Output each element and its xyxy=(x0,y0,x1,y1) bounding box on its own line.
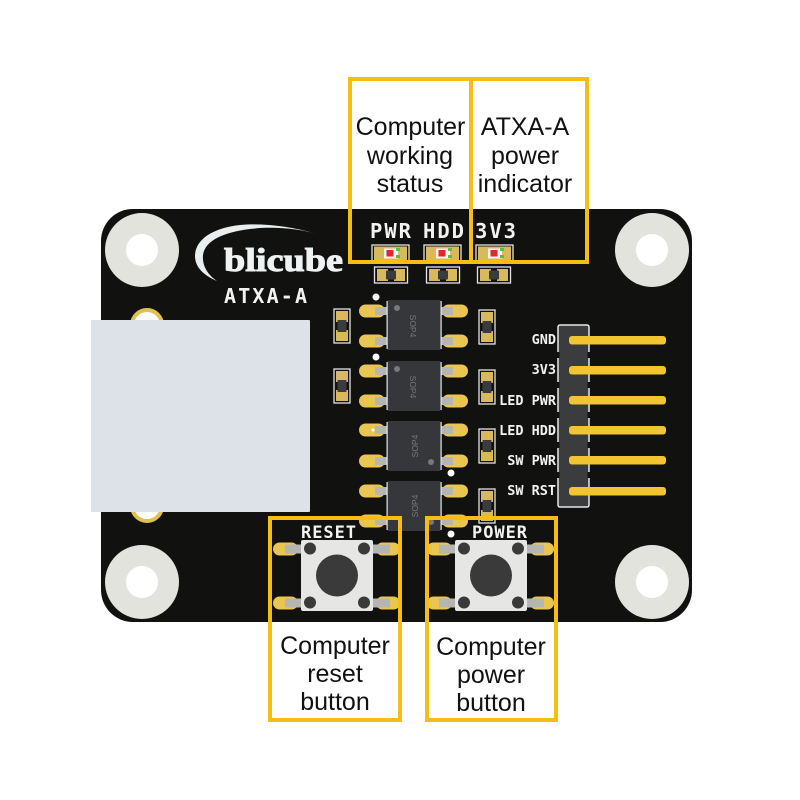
optocoupler legs xyxy=(375,307,453,525)
label: ATXA-A power indicator: indicator xyxy=(478,170,572,198)
callout box: computer working status xyxy=(350,79,471,262)
board name: ATXA-A xyxy=(224,284,307,308)
chip: SOP4 four: SOP4 xyxy=(410,494,420,517)
callout box: computer power button xyxy=(427,518,556,720)
LED row xyxy=(372,245,513,261)
chip: SOP4 three xyxy=(386,421,442,471)
chip: SOP4 two: SOP4 xyxy=(408,376,418,399)
label: computer reset button: button xyxy=(300,688,370,716)
label: computer power button xyxy=(436,633,546,717)
label: computer power button: button xyxy=(456,689,526,717)
pin labels: SW RST xyxy=(507,483,556,499)
mounting hole: top left xyxy=(105,213,179,287)
polarity dots xyxy=(372,294,454,538)
mounting hole: top right xyxy=(615,213,689,287)
pin header xyxy=(557,325,666,507)
silkscreen: 3V3: 3V3 xyxy=(475,219,516,243)
label: computer reset button: reset xyxy=(307,660,363,688)
chip: SOP4 two xyxy=(386,361,442,411)
mounting hole: bottom right xyxy=(615,545,689,619)
vertical resistors xyxy=(334,309,495,523)
label: computer power button: power xyxy=(457,661,525,689)
silkscreen: PWR: PWR xyxy=(370,219,412,243)
chip: SOP4 four xyxy=(386,481,442,531)
silkscreen: HDD: HDD xyxy=(423,219,464,243)
pin labels xyxy=(499,332,557,499)
label: computer working status: Computer xyxy=(356,113,465,141)
label: computer working status: status xyxy=(377,170,443,198)
connector through-hole pads xyxy=(132,310,162,521)
pin labels: 3V3 xyxy=(532,362,556,378)
pin labels: GND xyxy=(532,332,556,348)
label: computer power button: Computer xyxy=(436,633,546,661)
label: ATXA-A power indicator: ATXA-A xyxy=(481,113,570,141)
LED resistors xyxy=(374,267,510,283)
reset button xyxy=(273,540,400,611)
silkscreen: POWER: POWER xyxy=(472,523,528,543)
network connector housing xyxy=(91,320,310,512)
callout box: computer reset button xyxy=(270,518,400,720)
power button xyxy=(427,540,554,611)
label: computer working status: working xyxy=(366,142,453,170)
PCB board xyxy=(101,209,692,622)
mounting hole: bottom left xyxy=(105,545,179,619)
pin labels: SW PWR xyxy=(507,453,557,469)
silkscreen: RESET: RESET xyxy=(301,523,356,543)
callout box: ATXA-A power indicator xyxy=(471,79,587,262)
blicube logo xyxy=(195,224,343,281)
blicube logo: blicube xyxy=(224,243,343,279)
label: ATXA-A power indicator xyxy=(478,113,572,198)
label: computer reset button xyxy=(280,632,390,716)
pin labels: LED HDD xyxy=(499,423,556,439)
label: ATXA-A power indicator: power xyxy=(491,142,559,170)
label: computer reset button: Computer xyxy=(280,632,390,660)
pin labels: LED PWR xyxy=(499,393,557,409)
chip: SOP4 one: SOP4 xyxy=(408,315,418,338)
chip: SOP4 three: SOP4 xyxy=(410,434,420,457)
optocoupler pads xyxy=(359,304,468,528)
chip: SOP4 one xyxy=(386,300,442,350)
label: computer working status xyxy=(356,113,465,198)
